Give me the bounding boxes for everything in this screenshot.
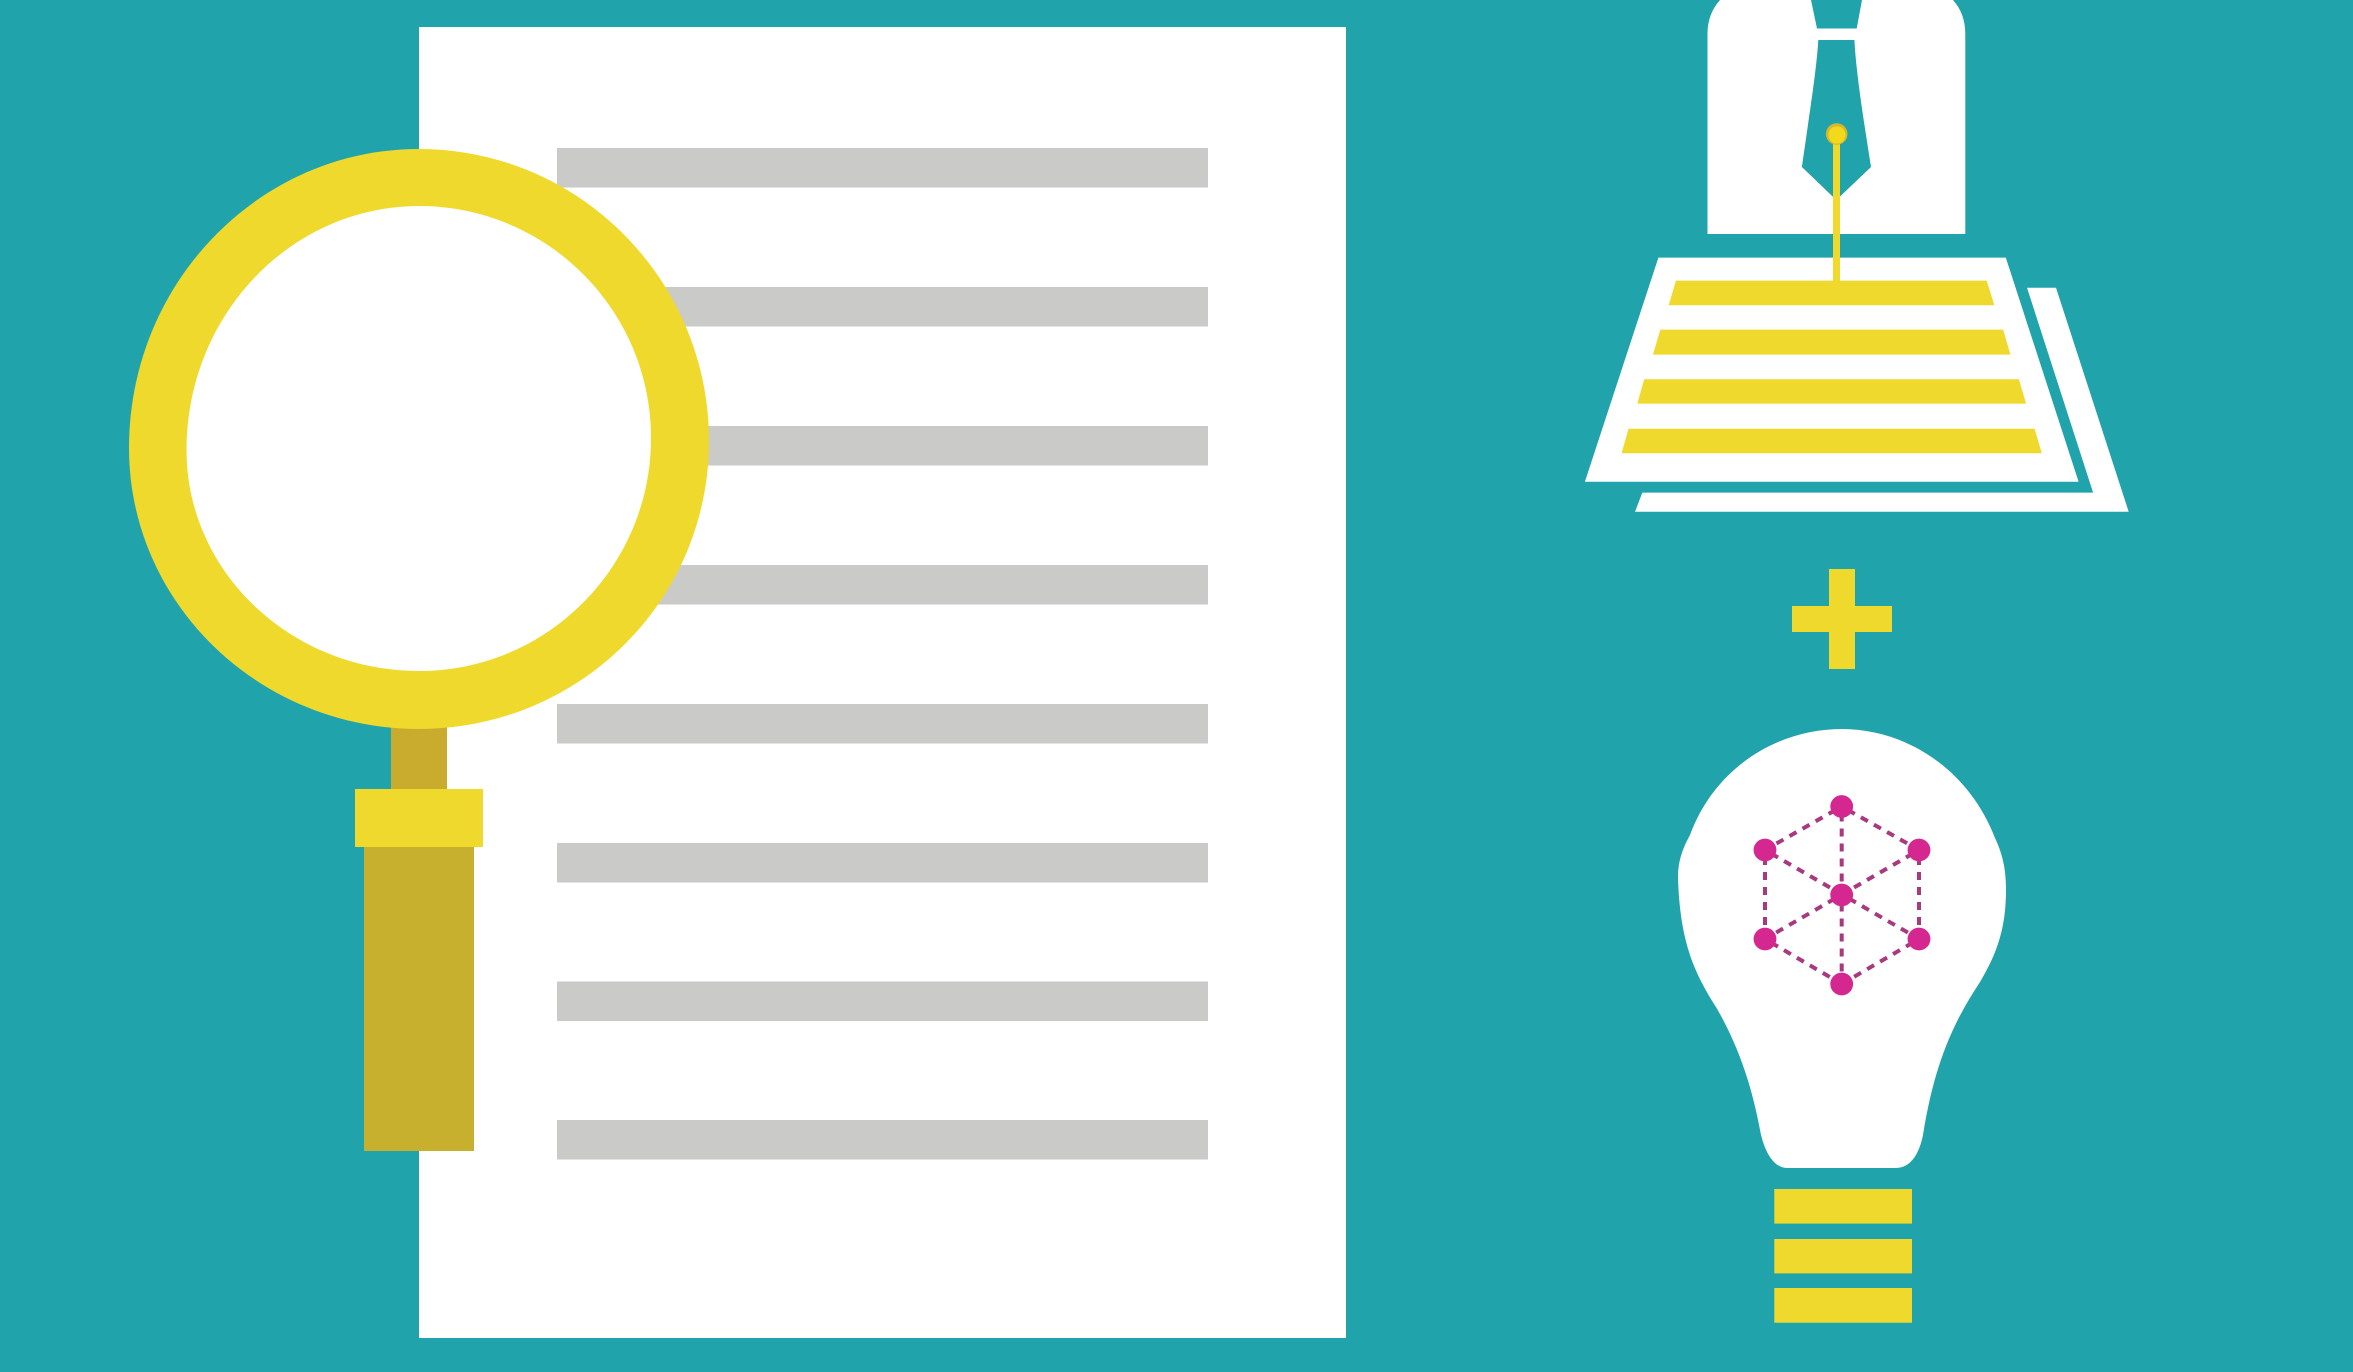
icon: light bulb with network cube [1678, 729, 2006, 1323]
magnifier collar [355, 789, 483, 847]
bulb glass [1678, 729, 2006, 1168]
necktie as pen nib [1802, 40, 1871, 200]
network cube edges [1765, 806, 1919, 984]
network cube nodes [1754, 795, 1930, 995]
icon: plus sign [1792, 569, 1892, 669]
magnifier ring [129, 149, 709, 729]
front sheet of paper [1585, 258, 2079, 482]
icon: magnifying glass [129, 149, 709, 1151]
document text lines [557, 148, 1208, 1160]
bulb screw base [1774, 1189, 1912, 1323]
pen nib hole inner [1828, 126, 1846, 144]
back sheet of paper [1635, 288, 2129, 512]
magnifier handle [364, 845, 474, 1151]
shirt torso [1708, 0, 1965, 234]
signature lines on paper [1622, 281, 2042, 453]
document sheet [419, 27, 1346, 1338]
icon: businessman with pen-nib tie signing documents [1585, 0, 2129, 512]
pen nib hole outer [1826, 123, 1847, 145]
magnifier neck [391, 720, 447, 790]
panel: document page [419, 27, 1346, 1338]
magnifier lens [186, 206, 651, 671]
pen ink line [1833, 142, 1840, 282]
